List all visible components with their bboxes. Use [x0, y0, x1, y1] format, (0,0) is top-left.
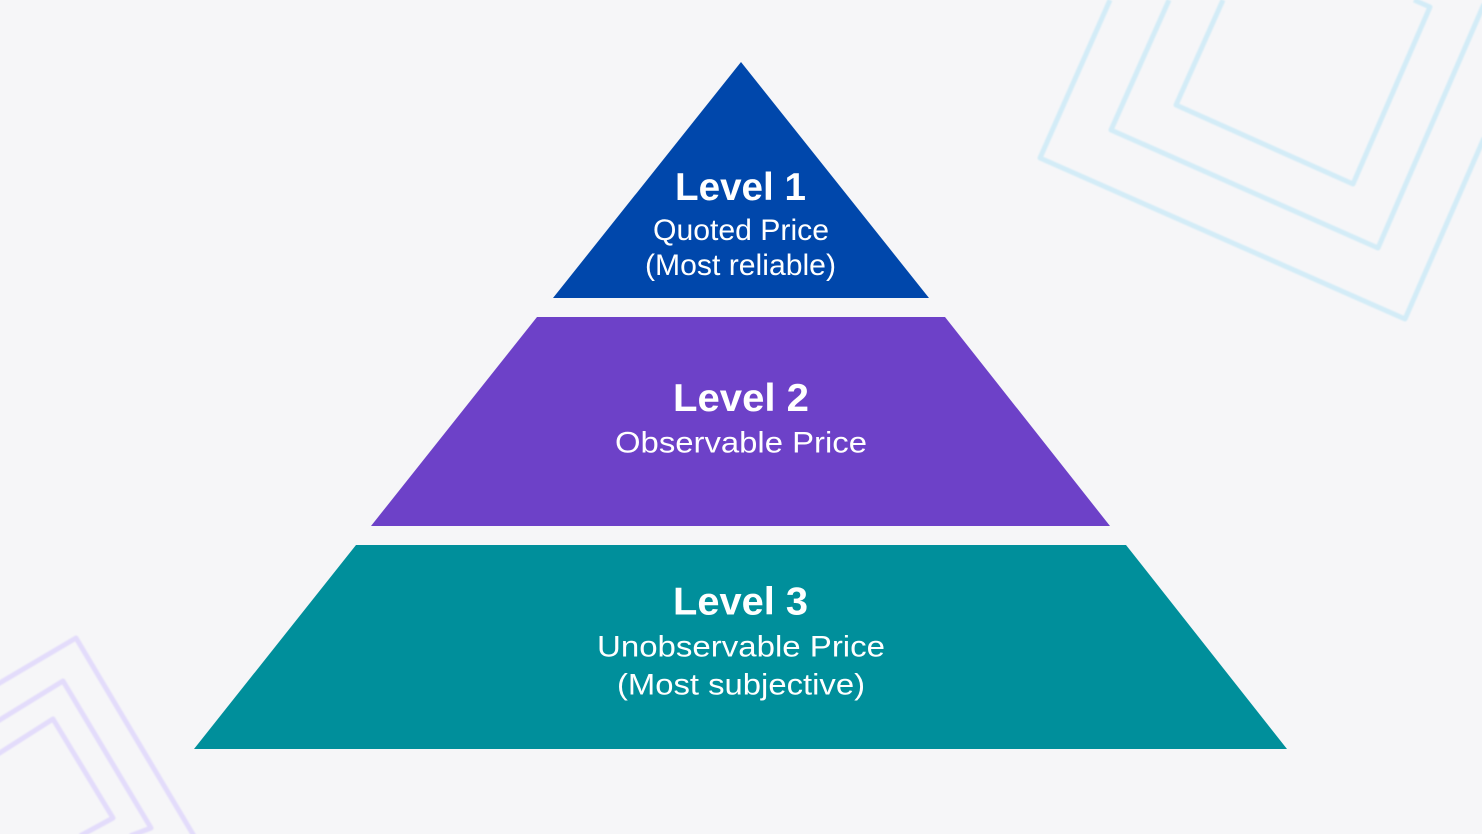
- level 2 description: Observable Price: [615, 426, 867, 460]
- level 2 heading: Level 2: [673, 377, 809, 420]
- level 2 trapezoid: [371, 317, 1110, 526]
- decorative squares: top right: [1040, 0, 1482, 319]
- level 1 description: Quoted Price: [653, 214, 829, 247]
- level 1 triangle: [553, 62, 929, 298]
- level 3 trapezoid: [194, 545, 1287, 749]
- level 3 description: (Most subjective): [617, 668, 865, 702]
- decorative squares: bottom left: [0, 638, 194, 834]
- level 1 description: (Most reliable): [645, 249, 836, 282]
- level 3 description: Unobservable Price: [597, 630, 885, 664]
- level 1 heading: Level 1: [675, 166, 806, 209]
- tier: level 3: [194, 545, 1287, 749]
- tier: level 2: [371, 317, 1110, 526]
- level 3 heading: Level 3: [673, 580, 808, 624]
- pyramid: [194, 62, 1287, 749]
- level 1 description: [645, 214, 836, 282]
- tier: level 1: [553, 62, 929, 298]
- level 3 description: [597, 630, 885, 702]
